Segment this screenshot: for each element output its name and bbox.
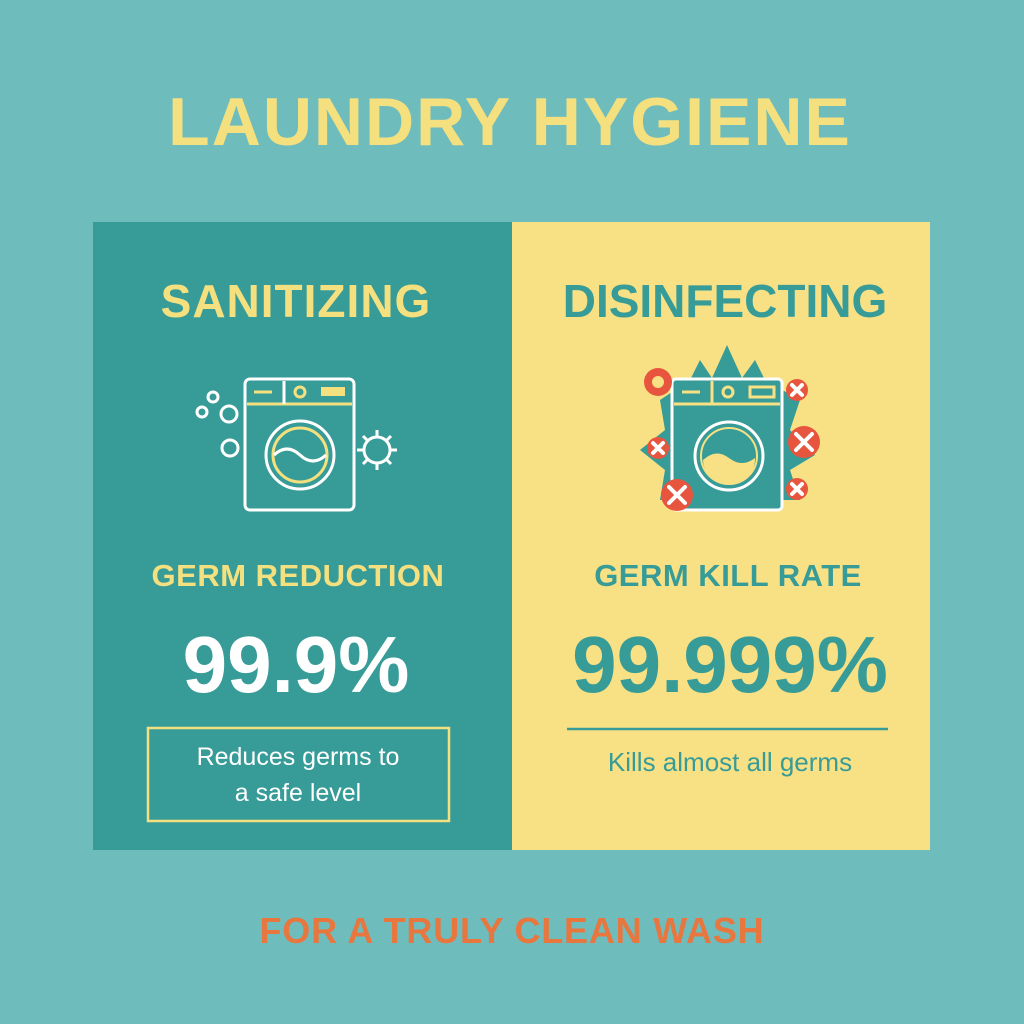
footer tagline: FOR A TRULY CLEAN WASH (260, 910, 764, 951)
panel: disinfecting (512, 222, 930, 850)
subheading: germ reduction: GERM REDUCTION (152, 558, 444, 593)
callout box: a safe level (235, 779, 361, 807)
title: LAUNDRY HYGIENE (168, 84, 852, 160)
heading: sanitizing: SANITIZING (161, 275, 431, 327)
callout box (148, 728, 449, 821)
icon: washing machine with bubbles (197, 379, 397, 510)
stat: 99.9%: 99.9% (183, 620, 409, 709)
panel: sanitizing (93, 222, 512, 850)
icon: washing machine with killed germs (640, 345, 820, 511)
caption: Kills almost all germs (608, 747, 852, 777)
subheading: germ kill rate: GERM KILL RATE (594, 558, 862, 593)
stat: 99.999%: 99.999% (572, 620, 888, 709)
callout box: Reduces germs to (197, 743, 399, 771)
heading: disinfecting: DISINFECTING (563, 275, 887, 327)
